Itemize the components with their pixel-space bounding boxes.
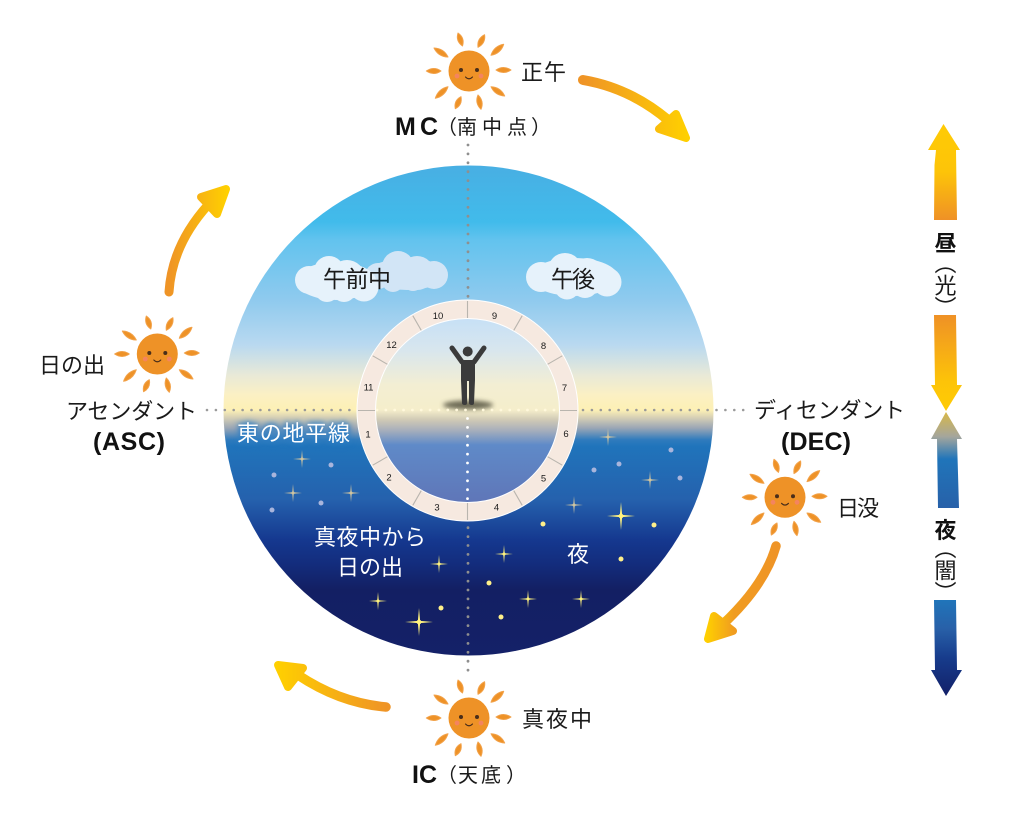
ring numbers: 10: [433, 311, 443, 322]
ring numbers: 3: [434, 502, 440, 514]
scale: day arrow up: [928, 124, 960, 220]
inner circle with person: [356, 300, 578, 522]
ring numbers: 11: [364, 382, 373, 394]
arrow: sunset to midnight: [708, 546, 776, 639]
label: descendant: [754, 398, 905, 456]
label: midnight to sunrise: [314, 525, 426, 580]
label: MC: （南中点）: [437, 116, 551, 139]
ring numbers: 7: [562, 383, 567, 394]
dotted axis: horizontal left ASC: [207, 409, 358, 411]
sun: sunset: [742, 459, 827, 536]
midnight axis dots: [466, 418, 469, 500]
label: ascendant: (ASC): [93, 428, 165, 456]
label: afternoon: 午後: [551, 266, 595, 292]
sun: noon: [426, 33, 511, 109]
cloud: back morning cloud: [365, 251, 448, 292]
ring numbers: 2: [386, 472, 392, 484]
label: darkness: （闇）: [932, 537, 956, 603]
stars: bright sparkles: [369, 502, 635, 636]
label: IC: [412, 761, 526, 789]
person shadow: [443, 400, 493, 410]
stars: dim dots: [270, 448, 682, 512]
label: sunrise: 日の出: [39, 353, 105, 378]
label: eastern horizon: 東の地平線: [237, 421, 350, 446]
ring numbers: [364, 311, 569, 514]
label: day: 昼: [934, 231, 957, 256]
label: descendant: ディセンダント: [754, 398, 905, 423]
person silhouette: [452, 346, 484, 405]
label: night: 夜: [934, 518, 957, 543]
ring ticks: [358, 301, 577, 520]
stars: dim sparkles: [284, 428, 659, 514]
ring numbers: 4: [494, 502, 499, 514]
main circle: sky to night: [224, 166, 714, 656]
scale: day arrow down: [931, 315, 962, 411]
cloud: front morning cloud: [295, 256, 378, 302]
arrow: sunrise to noon: [169, 189, 226, 292]
label: midnight to sunrise: 日の出: [337, 555, 403, 580]
dotted axis: horizontal right DEC: [583, 409, 745, 411]
ring numbers: 8: [541, 341, 546, 352]
ring numbers: 9: [492, 311, 497, 322]
label: IC: （天底）: [437, 764, 526, 787]
label: descendant: (DEC): [781, 428, 851, 456]
sun: midnight: [426, 680, 511, 756]
cloud: afternoon cloud: [526, 253, 622, 300]
ring numbers: 1: [365, 430, 371, 440]
arrow: midnight to sunrise: [278, 665, 386, 707]
ring numbers: 6: [563, 429, 569, 440]
scale: night arrow up: [931, 412, 962, 508]
ring numbers: 12: [386, 340, 397, 351]
stars: bright dots: [438, 522, 656, 620]
label: MC: [395, 113, 551, 141]
label: midnight: 真夜中: [522, 707, 592, 732]
label: morning: 午前中: [323, 266, 391, 292]
sun: sunrise: [115, 316, 199, 392]
label: IC: IC: [412, 761, 437, 789]
label: night: 夜: [567, 542, 589, 567]
label: sunset: 日没: [837, 496, 879, 521]
label: ascendant: アセンダント: [66, 399, 197, 424]
arrow: noon to sunset: [583, 80, 686, 138]
label: noon: 正午: [521, 60, 566, 85]
label: midnight to sunrise: 真夜中から: [314, 525, 426, 550]
scale: night arrow down: [931, 600, 962, 696]
label: ascendant: [66, 399, 197, 456]
horizon dots: [377, 409, 560, 411]
label: light: （光）: [932, 252, 956, 318]
dotted axis: vertical MC to IC: [467, 145, 469, 672]
ring numbers: 5: [541, 474, 546, 484]
label: MC: MC: [395, 113, 438, 141]
